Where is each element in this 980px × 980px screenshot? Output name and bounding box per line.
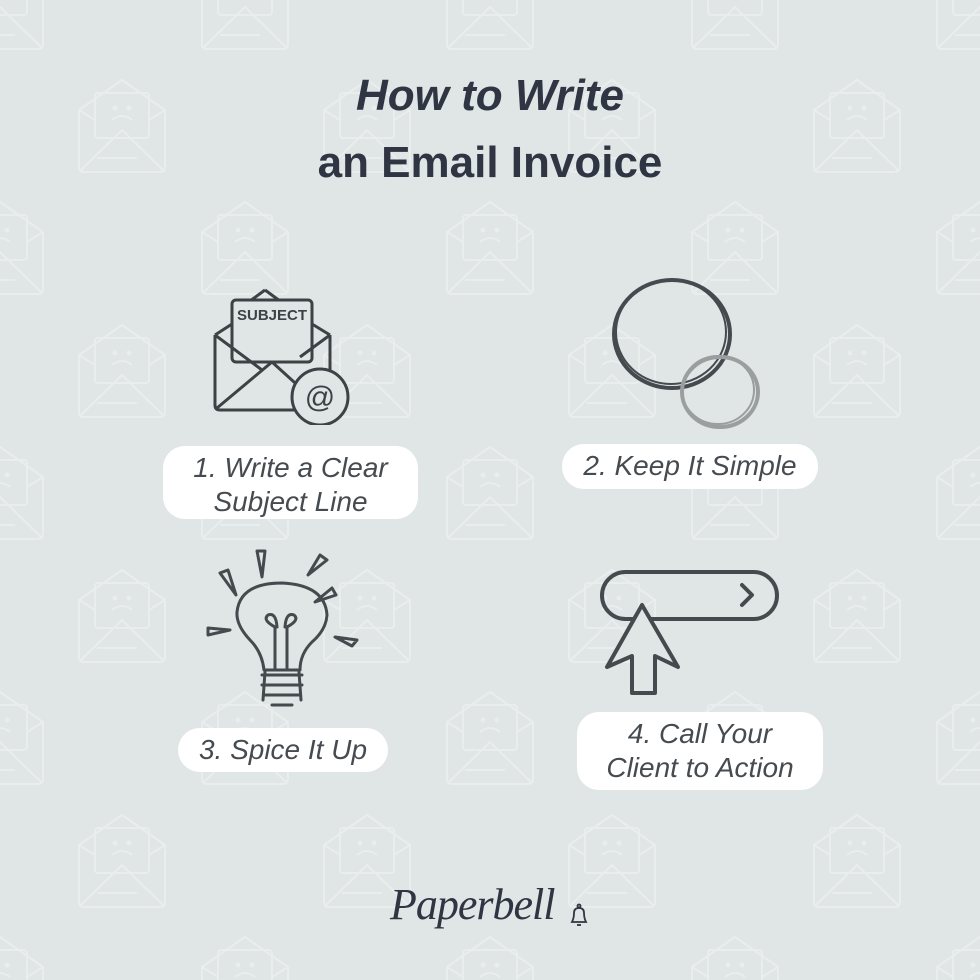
label 2 [562,444,818,489]
icon: button with cursor [600,570,779,695]
icon: light bulb [206,550,358,706]
logo: Paperbell: Paperbell [390,880,555,929]
label 4 [577,712,823,790]
icon: bell [570,904,588,926]
label 1: Subject Line [213,486,368,517]
icon: circles [612,278,760,429]
icon: envelope with subject and @: @ [305,381,335,414]
label 3 [178,728,388,772]
title [318,71,662,187]
title: an Email Invoice [318,138,662,187]
label 4: Client to Action [606,752,794,783]
label 4: 4. Call Your [628,718,772,749]
label 1: 1. Write a Clear [193,452,388,483]
icon: envelope with subject and @ [214,288,350,425]
icon: envelope with subject and @: SUBJECT [237,307,307,324]
title: How to Write [356,71,624,120]
label 3: 3. Spice It Up [199,734,367,765]
label 2: 2. Keep It Simple [583,450,797,481]
label 1 [163,446,418,519]
